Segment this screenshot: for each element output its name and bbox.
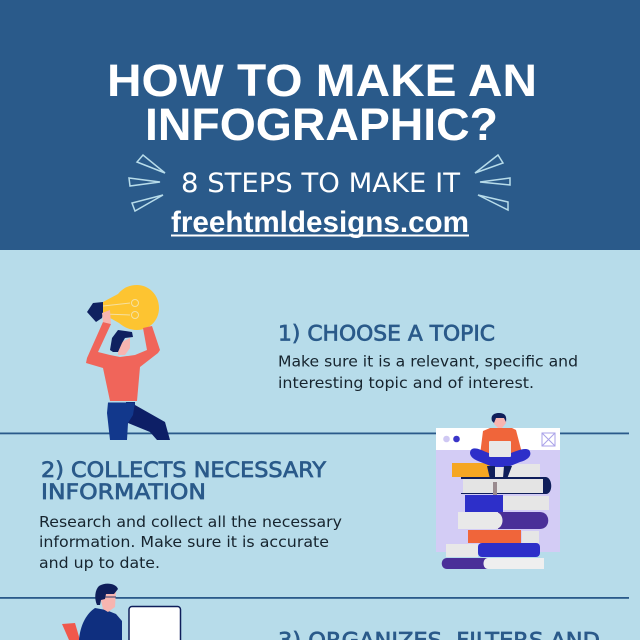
icon: light bulb	[87, 285, 159, 330]
heading	[41, 458, 326, 504]
illustration: man lifting light bulb	[86, 285, 170, 440]
hair	[95, 584, 118, 605]
app window	[436, 428, 560, 552]
body: Make sure it is a relevant, specific and	[278, 352, 578, 370]
jacket	[79, 608, 122, 640]
title: HOW TO MAKE AN	[107, 55, 537, 106]
body: and up to date.	[39, 554, 160, 572]
head	[100, 588, 116, 612]
body: information. Make sure it is accurate	[39, 533, 329, 551]
heading: 1) CHOOSE A TOPIC	[278, 322, 495, 346]
skin	[102, 310, 111, 324]
illustration: person on stack of books	[436, 413, 560, 569]
illustration: man at computer	[62, 584, 180, 640]
divider lines	[0, 432, 629, 599]
hair	[110, 330, 133, 352]
trousers	[126, 402, 170, 440]
heading: 2) COLLECTS NECESSARY	[41, 458, 326, 482]
header banner	[0, 0, 640, 250]
website link: freehtmldesigns.com	[171, 206, 469, 239]
step 2 text	[39, 458, 342, 572]
body: Research and collect all the necessary	[39, 513, 342, 531]
monitor	[129, 606, 180, 640]
body	[39, 513, 342, 572]
icon: left burst	[129, 155, 165, 211]
shirt and arms	[86, 322, 160, 401]
glasses	[105, 596, 116, 598]
person	[480, 428, 522, 455]
title: INFOGRAPHIC?	[145, 99, 498, 150]
books	[493, 464, 540, 477]
body: interesting topic and of interest.	[278, 374, 534, 392]
title	[107, 55, 537, 150]
subtitle: 8 STEPS TO MAKE IT	[181, 168, 461, 199]
body	[278, 352, 578, 392]
chair	[62, 623, 80, 640]
step 1 text	[278, 322, 578, 392]
heading: INFORMATION	[41, 480, 206, 504]
icon: right burst	[475, 155, 510, 210]
